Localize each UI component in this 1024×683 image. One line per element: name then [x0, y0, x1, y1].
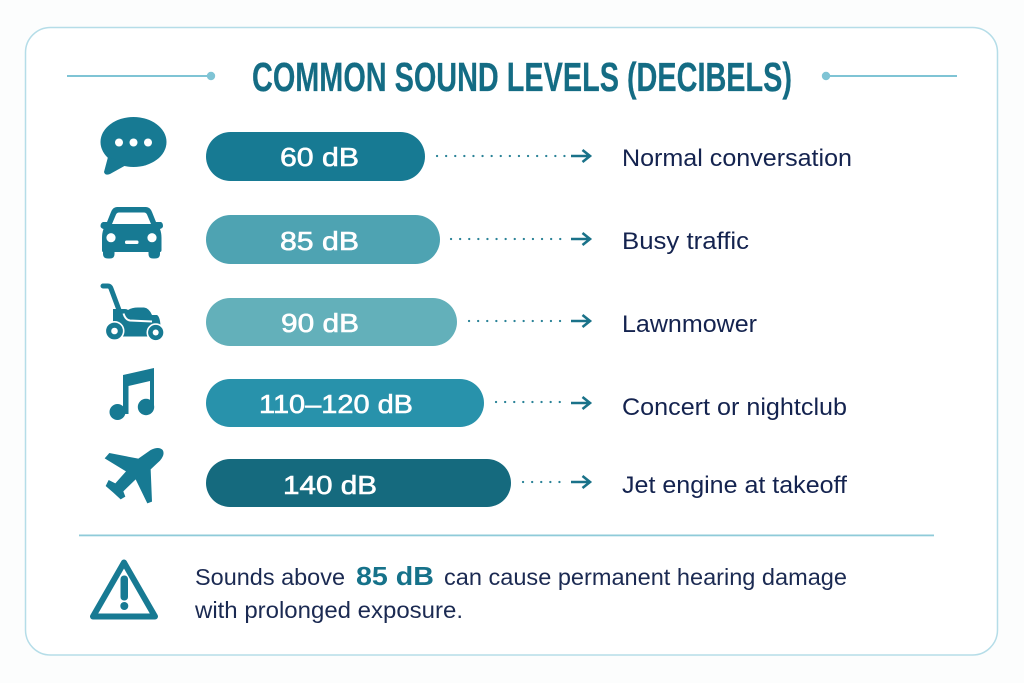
icon: warning triangle	[93, 562, 155, 616]
bar: 140 dB: 140 dB	[283, 470, 377, 500]
icon: speech bubble	[100, 117, 166, 175]
bar: 110-120 dB	[206, 379, 484, 427]
arrow	[437, 150, 590, 162]
label: Lawnmower	[622, 311, 757, 338]
row: 90 dB	[103, 286, 757, 346]
divider	[79, 534, 934, 536]
icon: music note	[110, 368, 154, 420]
icon: lawnmower	[103, 286, 164, 341]
arrow	[496, 397, 590, 409]
bar: 90 dB	[206, 298, 457, 346]
warning note: can cause permanent hearing damage	[444, 564, 847, 590]
arrow	[451, 233, 590, 245]
arrow	[523, 476, 590, 488]
bar: 60 dB	[206, 132, 425, 181]
bar: 110-120 dB: 110–120 dB	[259, 389, 413, 419]
label: Jet engine at takeoff	[622, 472, 847, 499]
row: 60 dB	[100, 117, 852, 181]
bar: 85 dB: 85 dB	[280, 226, 359, 256]
arrow	[469, 315, 590, 327]
row: 140 dB	[105, 448, 847, 507]
icon: car	[100, 207, 163, 258]
bar: 85 dB	[206, 215, 440, 264]
warning note	[194, 561, 847, 623]
label: Normal conversation	[622, 145, 852, 172]
warning note: Sounds above	[195, 564, 345, 590]
label: Busy traffic	[622, 228, 749, 255]
title: COMMON SOUND LEVELS (DECIBELS)	[252, 54, 792, 100]
label: Concert or nightclub	[622, 394, 847, 421]
bar: 90 dB: 90 dB	[281, 308, 359, 338]
bar: 60 dB: 60 dB	[280, 142, 359, 172]
row: 85 dB	[100, 207, 749, 264]
title rule right	[822, 72, 957, 80]
warning note: 85 dB	[356, 561, 434, 591]
icon: airplane	[105, 448, 164, 503]
title rule left	[67, 72, 215, 80]
row: 110-120 dB	[110, 368, 847, 427]
bar: 140 dB	[206, 459, 511, 507]
warning note: with prolonged exposure.	[194, 597, 463, 623]
